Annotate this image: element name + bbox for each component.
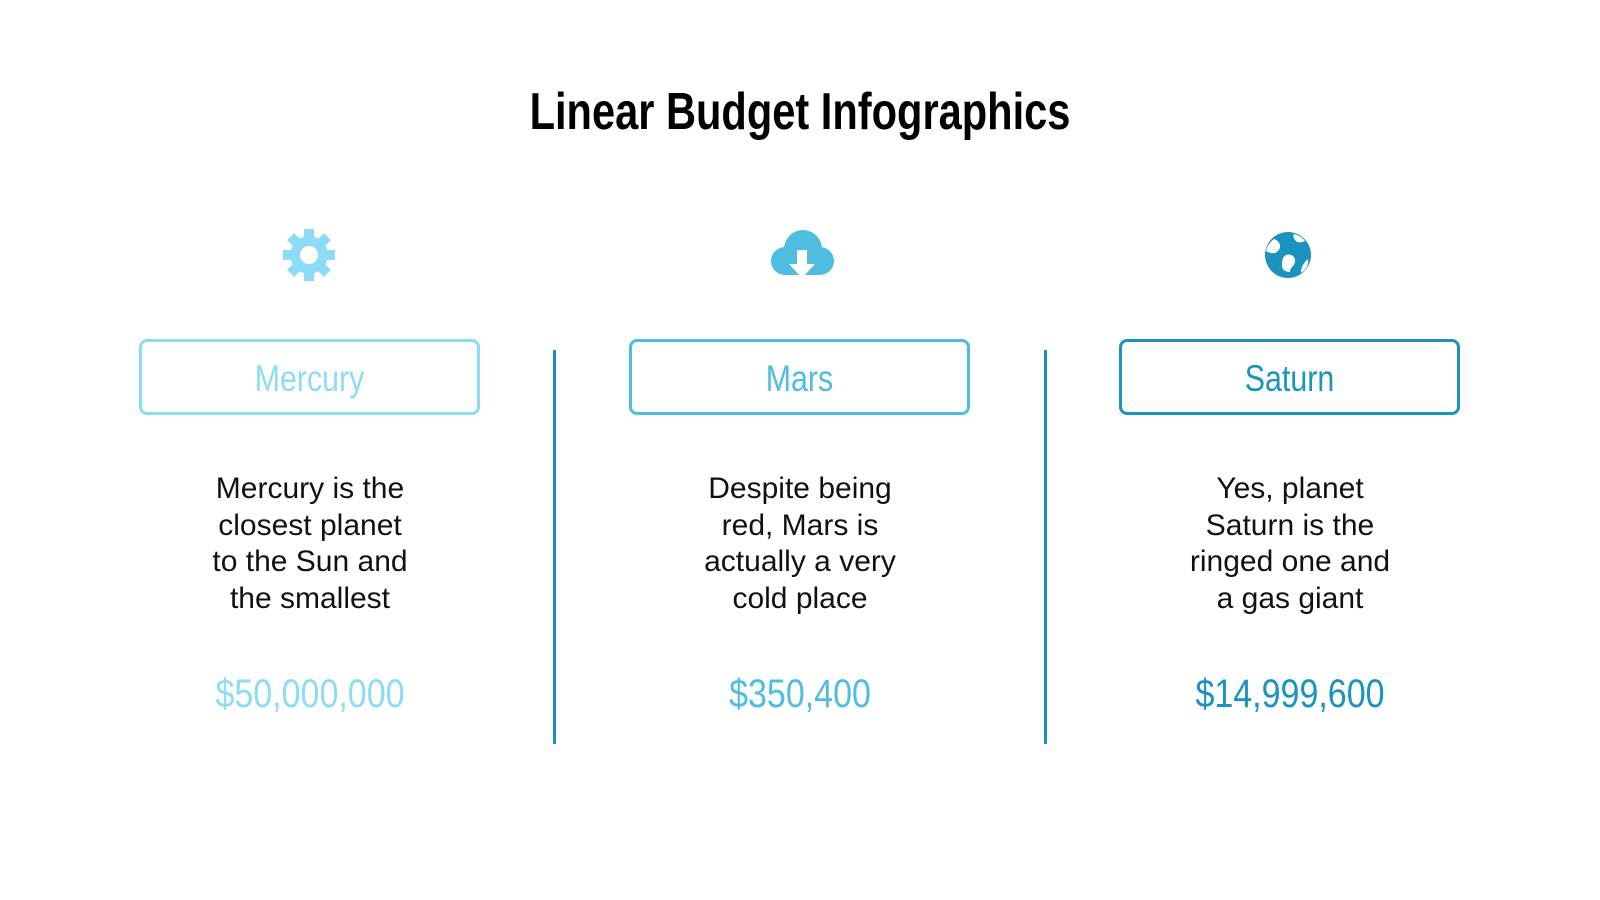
icon: globe (1265, 232, 1311, 278)
panel: Mercury label (139, 339, 480, 415)
text: Mars: Despite being (708, 472, 892, 505)
panel: Mercury label: Mercury (255, 358, 364, 399)
value: Mars: $350,400 (729, 672, 871, 716)
text: Saturn: a gas giant (1217, 582, 1363, 614)
panel: Saturn label: Saturn (1245, 358, 1334, 399)
text: Mars: red, Mars is (722, 508, 878, 542)
panel: Mars label (629, 339, 970, 415)
text: Mercury: closest planet (218, 508, 402, 542)
text: Mercury (212, 472, 408, 614)
divider 2 (1044, 350, 1047, 744)
text: Mars (704, 472, 896, 614)
text: Mars: actually a very (704, 545, 896, 578)
icon: cloud download (771, 230, 834, 275)
text: Saturn (1190, 472, 1390, 614)
text: Mars: cold place (732, 582, 868, 614)
icon: gear (283, 229, 335, 281)
text: Saturn: Yes, planet (1216, 472, 1364, 505)
title: Linear Budget Infographics (530, 83, 1070, 141)
text: Saturn: Saturn is the (1206, 508, 1374, 542)
panel: Saturn label (1119, 339, 1460, 415)
text: Mercury: Mercury is the (216, 472, 404, 505)
divider 1 (553, 350, 556, 744)
panel: Mars label: Mars (766, 358, 833, 399)
text: Mercury: the smallest (230, 582, 390, 614)
value: Mercury: $50,000,000 (215, 672, 405, 716)
text: Saturn: ringed one and (1190, 545, 1390, 578)
text: Mercury: to the Sun and (212, 545, 408, 578)
value: Saturn: $14,999,600 (1195, 672, 1385, 716)
